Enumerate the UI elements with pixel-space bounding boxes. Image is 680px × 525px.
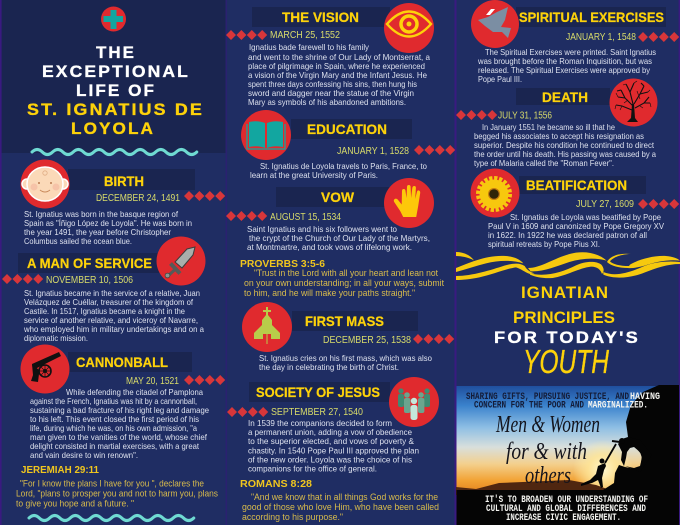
date: birth: DECEMBER 24, 1491 — [96, 193, 180, 204]
date: death: JULY 31, 1556 — [498, 110, 552, 122]
panel: the vision — [226, 3, 434, 107]
photo text: men and women — [495, 412, 600, 489]
text block: birth — [24, 209, 192, 246]
verse text: proverbs — [244, 267, 444, 298]
photo text: men and women: others — [525, 463, 571, 489]
photo text: men and women: Men & Women — [495, 412, 600, 438]
panel: title — [27, 6, 204, 154]
text: youth: YOUTH — [523, 343, 609, 380]
text block: cannonball: and vain desire to win renown". — [30, 450, 138, 460]
photo text: top: HAVING — [630, 392, 660, 403]
title text: LIFE OF — [76, 82, 156, 100]
text block: birth: St. Ignatius was born in the basque region of — [24, 209, 179, 219]
heading bar: education — [291, 119, 412, 139]
text block: spiritual exercises — [477, 47, 656, 84]
heading bar: cannonball — [68, 352, 192, 372]
date: a man of service — [2, 274, 133, 286]
panel: education — [241, 110, 455, 180]
icon: bare tree — [610, 78, 658, 126]
verse text: jeremiah: "For I know the plans I have for you ", declares the — [20, 478, 204, 488]
text block: cannonball: man given to the vanities of the world, whose chief — [30, 432, 208, 442]
heading bar: the vision: THE VISION — [282, 9, 359, 25]
text: for today's: FOR TODAY'S — [494, 329, 640, 347]
heading bar: birth — [68, 169, 195, 190]
title text: EXCEPTIONAL — [42, 63, 190, 81]
text block: vow: at Montmartre, and took vows of lifelong work. — [247, 242, 412, 252]
text block: society of jesus — [248, 418, 419, 474]
text block: the vision: sword and dagger near the statue of the Virgin — [248, 88, 414, 98]
verse text: romans — [242, 491, 439, 522]
panel: a man of service — [2, 236, 206, 343]
text block: death: superior. Despite his condition he continued to direct — [474, 140, 655, 150]
text block: death: begged his associates to accept his resignation as — [474, 131, 644, 141]
panel: cannonball — [16, 344, 225, 520]
text block: cannonball: delight consisted in martial exercises, with a great — [30, 441, 200, 451]
panel: sunset climbers photo — [456, 385, 679, 525]
text block: spiritual exercises: was brought before the Roman Inquisition, but was — [477, 56, 652, 66]
text block: spiritual exercises: Pope Paul III. — [478, 74, 522, 84]
text block: first mass: St. Ignatius cries on his first mass, which was also — [259, 353, 432, 363]
date: first mass — [323, 334, 454, 346]
date: vow: AUGUST 15, 1534 — [270, 212, 341, 223]
text block: cannonball: to his left. This event closed the first period of his — [30, 414, 199, 424]
icon: group of people — [389, 377, 439, 427]
heading bar: birth: BIRTH — [104, 173, 144, 189]
date: society of jesus — [227, 407, 363, 418]
date: vow — [226, 211, 341, 223]
icon: red cross badge — [101, 6, 126, 32]
text block: a man of service: St. Ignatius became in the service of a relative, Juan — [24, 288, 200, 298]
date: education — [337, 145, 455, 157]
panel: vow — [226, 178, 444, 298]
panel: beatification — [470, 168, 679, 249]
text block: beatification — [488, 212, 664, 249]
text block: spiritual exercises: released. The Spiritual Exercises were approved by — [478, 65, 651, 75]
verse heading: jeremiah: JEREMIAH 29:11 — [21, 464, 99, 476]
icon: open book — [241, 110, 291, 160]
heading bar: death: DEATH — [542, 89, 588, 105]
icon: baby face — [20, 160, 70, 208]
verse text: romans: according to his purpose." — [242, 511, 343, 522]
icon: sunflower — [470, 168, 520, 218]
text block: death — [474, 122, 656, 168]
date: cannonball: MAY 20, 1521 — [126, 376, 179, 387]
text block: a man of service: service of another relative, and viceroy of Navarre, — [24, 315, 198, 325]
text block: society of jesus: a permanent union, adding a vow of obedience — [248, 427, 412, 437]
verse text: jeremiah: Lord, "plans to prosper you and not to harm you, plans — [16, 488, 218, 498]
verse heading: proverbs: PROVERBS 3:5-6 — [240, 258, 325, 270]
text block: vow: the crypt of the Church of Our Lady of the Martyrs, — [249, 233, 430, 243]
icon: raised hand — [384, 178, 434, 228]
text block: society of jesus: companions for the office of general. — [248, 464, 377, 474]
text block: beatification: St. Ignatius de Loyola was beatified by Pope — [510, 212, 661, 222]
text block: beatification: in 1622. In 1922 he was declared patron of all — [488, 230, 647, 240]
text block: beatification: Paul V in 1609 and canonized by Pope Gregory XV — [488, 221, 664, 231]
verse heading: romans: ROMANS 8:28 — [240, 478, 312, 490]
heading bar: beatification: BEATIFICATION — [526, 177, 627, 193]
date: first mass: DECEMBER 25, 1538 — [323, 335, 411, 346]
verse text: proverbs: on your own understanding; in all your ways, submit — [244, 277, 444, 288]
text block: death: type of Malaria called the "Roman Fever". — [474, 158, 614, 168]
verse text: romans: good of those who love Him, who have been called — [242, 501, 439, 512]
photo text: top: CONCERN FOR THE POOR AND — [474, 400, 584, 412]
text block: cannonball: against the French, Ignatius was hit by a cannonball, — [30, 396, 197, 406]
heading bar: first mass — [292, 311, 418, 331]
heading bar: vow: VOW — [321, 189, 355, 205]
text block: a man of service — [23, 288, 204, 343]
photo text: bottom: INCREASE CIVIC ENGAGEMENT. — [506, 513, 621, 524]
panel: first mass — [242, 302, 454, 372]
photo text: men and women: for & with — [506, 439, 587, 465]
date: education: JANUARY 1, 1528 — [337, 146, 409, 157]
icon: dove — [471, 0, 519, 48]
photo text: bottom — [485, 494, 648, 524]
text block: society of jesus: chastity. In 1540 Pope Paul III approved the plan — [248, 446, 419, 456]
photo background — [456, 385, 679, 525]
verse text: proverbs: "Trust in the Lord with all your heart and lean not — [254, 267, 438, 278]
text block: the vision: a vision of the Virgin Mary and the Infant Jesus. He — [248, 70, 427, 80]
icon: sword — [156, 236, 206, 286]
decorative gold ribbon — [456, 252, 680, 280]
photo text: top — [466, 392, 660, 412]
date: birth — [96, 191, 225, 204]
heading bar: spiritual exercises: SPIRITUAL EXERCISES — [519, 9, 664, 25]
date: spiritual exercises: JANUARY 1, 1548 — [566, 32, 636, 43]
date: the vision: MARCH 25, 1552 — [270, 30, 340, 41]
text block: the vision: and went to the shrine of Our Lady of Montserrat, a — [248, 52, 430, 62]
heading bar: society of jesus: SOCIETY OF JESUS — [256, 384, 380, 400]
text: ignatian: IGNATIAN — [521, 283, 608, 302]
decorative wave under title — [32, 150, 197, 154]
text block: education: St. Ignatius de Loyola travels to Paris, France, to — [260, 161, 427, 171]
decorative wave bottom — [29, 516, 194, 520]
text block: birth: Columbus sailed the ocean blue. — [24, 236, 132, 246]
panel: death — [456, 78, 658, 168]
text block: the vision: place of pilgrimage in Spain, where he experienced — [248, 61, 425, 71]
text block: education — [250, 161, 427, 180]
text block: the vision — [248, 42, 430, 107]
title text: THE — [96, 44, 136, 62]
panel: spiritual exercises — [471, 0, 679, 84]
date: beatification: JULY 27, 1609 — [576, 199, 634, 210]
text block: a man of service: Velázquez de Cuéllar, treasurer of the kingdom of — [24, 297, 194, 307]
date: a man of service: NOVEMBER 10, 1506 — [46, 275, 133, 286]
date: beatification — [576, 199, 679, 210]
text block: a man of service: Castile. In 1517, Ignatius became a knight in the — [24, 306, 185, 316]
text block: a man of service: who employed him in military undertakings and on a — [23, 324, 204, 334]
text block: cannonball: While defending the citadel of Pamplona — [66, 387, 203, 397]
verse text: jeremiah — [16, 478, 218, 508]
date: society of jesus: SEPTEMBER 27, 1540 — [271, 407, 363, 418]
photo text: top: MARGINALIZED. — [588, 400, 648, 412]
text block: first mass: the day in celebrating the birth of Christ. — [259, 362, 399, 372]
panel: birth — [20, 160, 225, 246]
verse text: proverbs: to him, and he will make your paths straight." — [244, 287, 415, 298]
text block: cannonball — [30, 387, 209, 460]
text block: cannonball: sustaining a bad fracture of his right leg and damage — [30, 405, 209, 415]
title text: ST. IGNATIUS DE — [27, 101, 204, 119]
text block: death: the order until his death. His passing was caused by a — [474, 149, 656, 159]
text block: education: learn at the great University of Paris. — [250, 170, 378, 180]
text block: society of jesus: of the new order. Loyola was the choice of his — [248, 454, 412, 464]
text block: cannonball: life, during which he was, on his own admission, "a — [30, 423, 197, 433]
heading bar: vow — [276, 187, 390, 207]
text block: the vision: Mary as symbols of his abandoned ambitions. — [248, 97, 406, 107]
text block: the vision: spent three days confessing his sins, then hung his — [248, 79, 417, 89]
photo text: top: SHARING GIFTS, PURSUING JUSTICE, AND — [466, 392, 629, 403]
heading bar: education: EDUCATION — [307, 121, 387, 137]
text block: birth: the year 1491, the year before Christopher — [24, 227, 171, 237]
text block: vow — [247, 224, 430, 252]
icon: cannon — [20, 344, 70, 394]
text block: society of jesus: In 1539 the companions decided to form — [248, 418, 392, 428]
heading bar: cannonball: CANNONBALL — [76, 354, 168, 370]
text block: society of jesus: to the superior elected, and vows of poverty & — [248, 436, 414, 446]
date: death — [456, 110, 552, 122]
heading bar: a man of service: A MAN OF SERVICE — [27, 255, 152, 271]
verse text: romans: "And we know that in all things God works for the — [251, 491, 438, 502]
text block: the vision: Ignatius bade farewell to his family — [249, 42, 370, 52]
icon: church — [242, 302, 292, 352]
title text: LOYOLA — [71, 120, 155, 138]
text block: a man of service: diplomatic mission. — [24, 333, 88, 343]
text: principles: PRINCIPLES — [513, 308, 615, 327]
date: cannonball — [126, 375, 225, 387]
heading bar: first mass: FIRST MASS — [305, 313, 384, 329]
text block: first mass — [259, 353, 432, 372]
icon: eye — [384, 3, 434, 53]
title text — [27, 44, 204, 138]
panel: ignatian principles heading — [494, 283, 640, 380]
text block: vow: Saint Ignatius and his six followers went to — [247, 224, 397, 234]
text block: birth: Spain as "Íñigo López de Loyola". He was born in — [24, 218, 192, 228]
date: the vision — [226, 30, 340, 41]
text block: death: In January 1551 he became so ill that he — [482, 122, 615, 132]
text block: spiritual exercises: The Spiritual Exercises were printed. Saint Ignatius — [485, 47, 656, 57]
heading bar: the vision — [252, 7, 390, 27]
verse text: jeremiah: to give you hope and a future. " — [16, 498, 134, 508]
text block: beatification: spiritual retreats by Pope Pius XI. — [488, 239, 600, 249]
panel: society of jesus — [227, 377, 439, 522]
heading bar: death — [516, 88, 610, 105]
